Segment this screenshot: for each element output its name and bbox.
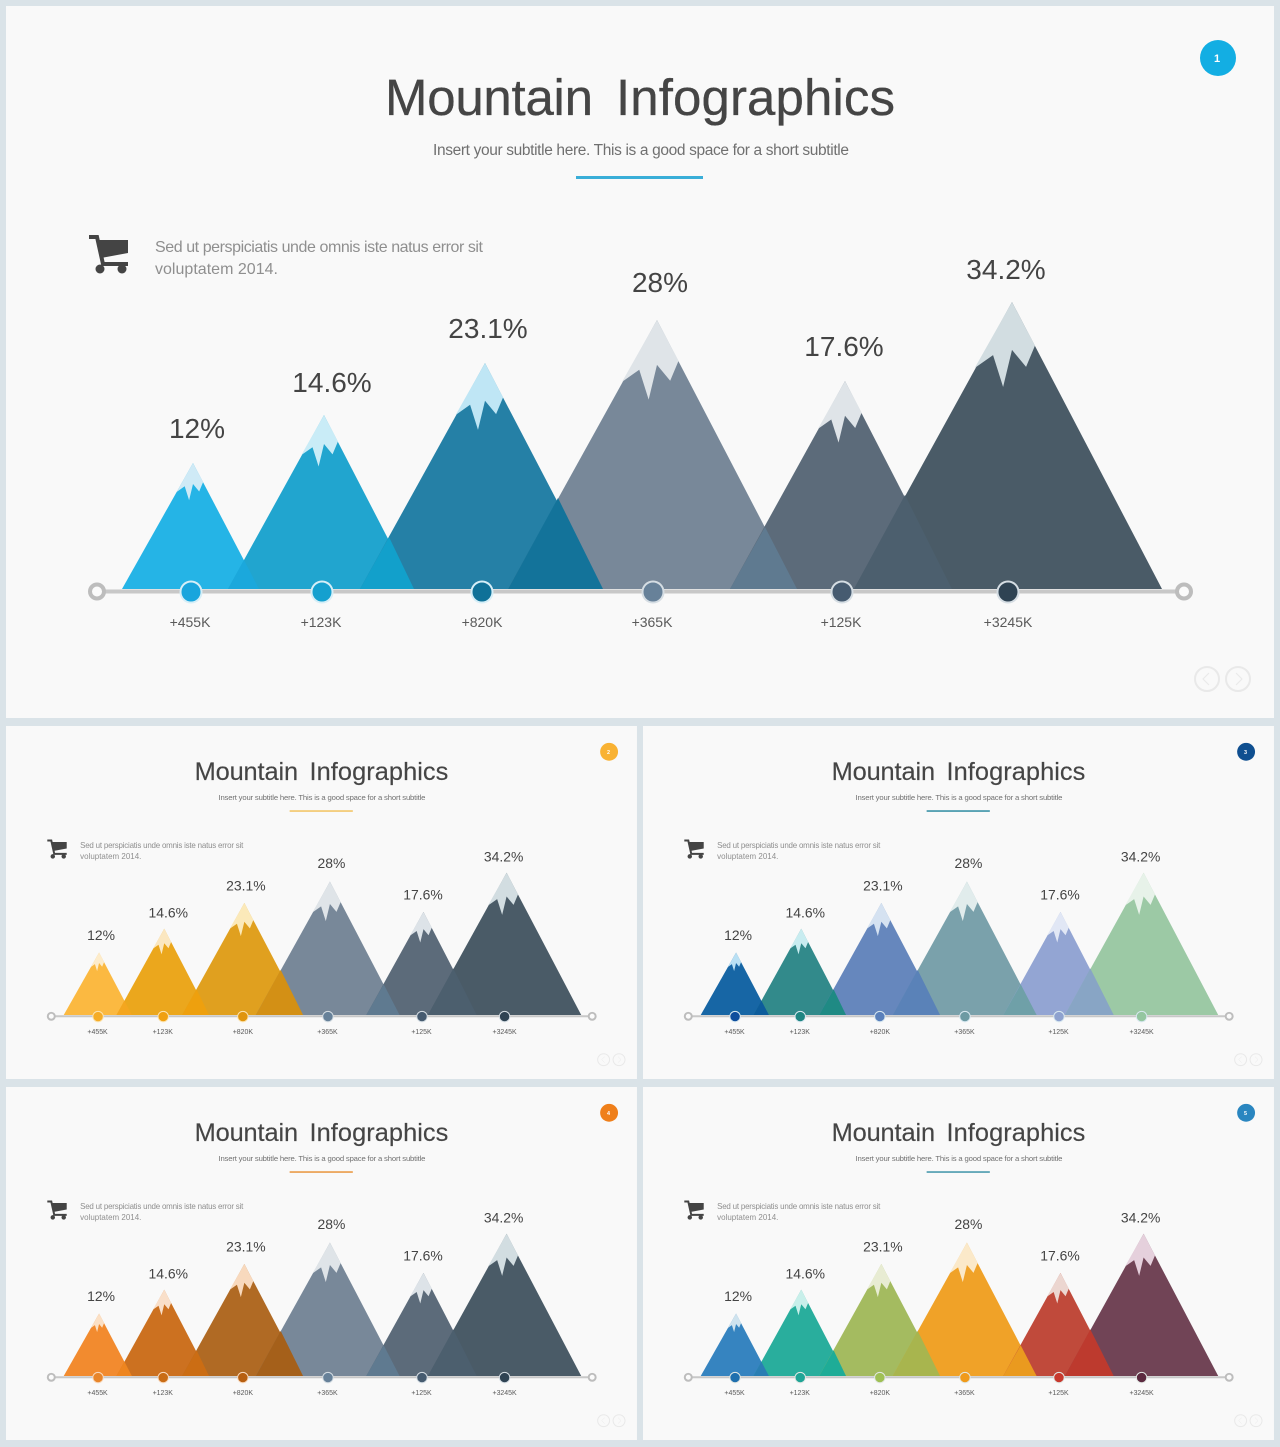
percentage labels: 34.2% xyxy=(1121,848,1160,864)
panel: blue-green slide xyxy=(643,726,1274,1079)
value labels: +455K xyxy=(87,1029,108,1036)
axis markers xyxy=(93,1011,510,1022)
percentage labels: 23.1% xyxy=(448,313,528,344)
title: Infographics xyxy=(310,758,448,786)
subtitle: Insert your subtitle here. This is a good space for a short subtitle xyxy=(218,1154,425,1163)
title xyxy=(195,1119,448,1147)
title underline xyxy=(290,810,353,812)
axis markers xyxy=(730,1372,1147,1383)
badge: slide number xyxy=(1237,743,1255,761)
description text: Sed ut perspiciatis unde omnis iste natus error sit xyxy=(80,841,244,850)
panel: multicolour slide xyxy=(643,1087,1274,1440)
mountain chart xyxy=(48,848,596,1036)
description text: voluptatem 2014. xyxy=(80,1213,141,1222)
nav arrows xyxy=(1235,1054,1262,1066)
subtitle: Insert your subtitle here. This is a good space for a short subtitle xyxy=(218,793,425,802)
percentage labels xyxy=(169,254,1046,444)
subtitle: Insert your subtitle here. This is a good space for a short subtitle xyxy=(855,1154,1062,1163)
mountain 6: 34.2% xyxy=(854,302,1162,589)
description text xyxy=(80,1202,244,1222)
mountain 6: 34.2% xyxy=(428,873,581,1015)
value labels: +365K xyxy=(954,1029,975,1036)
mountain 6: 34.2% xyxy=(1065,1234,1218,1376)
axis end ring: left xyxy=(685,1013,692,1020)
value labels: +123K xyxy=(790,1029,810,1036)
axis markers xyxy=(730,1011,1147,1022)
percentage labels: 12% xyxy=(169,413,225,444)
axis end ring: left xyxy=(48,1374,55,1381)
axis markers xyxy=(93,1372,510,1383)
percentage labels: 34.2% xyxy=(1121,1209,1160,1225)
description text xyxy=(80,841,244,861)
badge: slide number: 5 xyxy=(1244,1111,1247,1117)
title: Mountain xyxy=(385,69,593,126)
percentage labels xyxy=(87,1209,523,1304)
value labels: +3245K xyxy=(1130,1029,1154,1036)
value labels: +365K xyxy=(632,614,673,630)
title xyxy=(195,758,448,786)
description text: Sed ut perspiciatis unde omnis iste natus error sit xyxy=(717,1202,881,1211)
percentage labels: 14.6% xyxy=(785,904,825,920)
percentage labels: 28% xyxy=(317,1216,345,1232)
value labels: +3245K xyxy=(493,1390,517,1397)
badge: slide number: 3 xyxy=(1244,750,1247,756)
percentage labels: 17.6% xyxy=(1040,1248,1080,1264)
title: Mountain xyxy=(195,1119,298,1147)
title: Mountain xyxy=(832,1119,935,1147)
icon: shopping cart xyxy=(684,841,704,859)
badge: slide number xyxy=(1237,1104,1255,1122)
mountain 4: 28% xyxy=(893,1243,1037,1376)
mountain chart xyxy=(90,254,1191,630)
value labels xyxy=(724,1390,1154,1397)
icon: shopping cart xyxy=(684,1202,704,1220)
description text: voluptatem 2014. xyxy=(717,852,778,861)
percentage labels: 23.1% xyxy=(863,1239,903,1255)
description text: Sed ut perspiciatis unde omnis iste natus error sit xyxy=(717,841,881,850)
description text: Sed ut perspiciatis unde omnis iste natus error sit xyxy=(80,1202,244,1211)
mountain chart xyxy=(685,848,1233,1036)
percentage labels: 14.6% xyxy=(292,367,372,398)
percentage labels: 23.1% xyxy=(863,878,903,894)
value labels: +125K xyxy=(821,614,862,630)
title underline xyxy=(576,176,703,179)
percentage labels: 23.1% xyxy=(226,1239,266,1255)
subtitle: Insert your subtitle here. This is a good space for a short subtitle xyxy=(855,793,1062,802)
mountain 1: 12% xyxy=(701,953,769,1015)
title: Infographics xyxy=(947,758,1085,786)
title: Infographics xyxy=(310,1119,448,1147)
axis end ring: right xyxy=(589,1013,596,1020)
title xyxy=(832,758,1085,786)
title underline xyxy=(927,1171,990,1173)
panel: orange slide xyxy=(6,1087,637,1440)
percentage labels: 14.6% xyxy=(148,1265,188,1281)
value labels xyxy=(87,1029,517,1036)
axis end ring: right xyxy=(1226,1013,1233,1020)
value labels: +123K xyxy=(301,614,342,630)
mountain 3: 23.1% xyxy=(360,363,603,589)
value labels: +820K xyxy=(870,1390,890,1397)
percentage labels: 28% xyxy=(632,267,688,298)
title: Mountain xyxy=(832,758,935,786)
badge: slide number xyxy=(1200,40,1236,76)
value labels: +125K xyxy=(411,1029,432,1036)
percentage labels: 28% xyxy=(954,1216,982,1232)
title: Infographics xyxy=(616,69,895,126)
value labels: +123K xyxy=(790,1390,810,1397)
mountain 4: 28% xyxy=(256,882,400,1015)
nav arrows xyxy=(1195,667,1250,691)
axis end ring: right xyxy=(1177,584,1191,598)
mountain 4: 28% xyxy=(508,320,797,589)
description text xyxy=(155,239,484,278)
badge: slide number: 2 xyxy=(607,750,610,756)
percentage labels: 17.6% xyxy=(403,887,443,903)
value labels: +3245K xyxy=(1130,1390,1154,1397)
badge: slide number: 1 xyxy=(1214,53,1220,65)
description text: voluptatem 2014. xyxy=(155,261,278,278)
value labels: +123K xyxy=(153,1029,173,1036)
mountain 3: 23.1% xyxy=(182,903,303,1015)
mountain 1: 12% xyxy=(64,953,132,1015)
badge: slide number xyxy=(600,1104,618,1122)
description text: voluptatem 2014. xyxy=(717,1213,778,1222)
mountain 1: 12% xyxy=(64,1314,132,1376)
mountain 1: 12% xyxy=(122,463,259,589)
icon: shopping cart xyxy=(89,237,128,274)
mountain 5: 17.6% xyxy=(366,1273,477,1376)
nav arrows xyxy=(598,1415,625,1427)
mountain 1: 12% xyxy=(701,1314,769,1376)
mountain 6: 34.2% xyxy=(1065,873,1218,1015)
mountain 5: 17.6% xyxy=(1003,912,1114,1015)
value labels: +123K xyxy=(153,1390,173,1397)
percentage labels: 34.2% xyxy=(484,1209,523,1225)
mountain 5: 17.6% xyxy=(1003,1273,1114,1376)
axis end ring: right xyxy=(589,1374,596,1381)
mountain 2: 14.6% xyxy=(228,415,414,589)
title underline xyxy=(290,1171,353,1173)
subtitle: Insert your subtitle here. This is a good space for a short subtitle xyxy=(433,142,849,159)
percentage labels: 14.6% xyxy=(148,904,188,920)
value labels: +455K xyxy=(724,1390,745,1397)
percentage labels: 34.2% xyxy=(966,254,1046,285)
value labels: +820K xyxy=(233,1029,253,1036)
nav arrows xyxy=(1235,1415,1262,1427)
percentage labels: 28% xyxy=(317,855,345,871)
axis end ring: left xyxy=(48,1013,55,1020)
value labels: +820K xyxy=(233,1390,253,1397)
mountain 3: 23.1% xyxy=(819,1264,940,1376)
mountain 3: 23.1% xyxy=(182,1264,303,1376)
value labels: +125K xyxy=(411,1390,432,1397)
percentage labels: 17.6% xyxy=(1040,887,1080,903)
axis end ring: right xyxy=(1226,1374,1233,1381)
value labels: +820K xyxy=(870,1029,890,1036)
axis end ring: left xyxy=(90,584,104,598)
mountain 4: 28% xyxy=(256,1243,400,1376)
percentage labels: 17.6% xyxy=(403,1248,443,1264)
title xyxy=(385,69,895,126)
icon: shopping cart xyxy=(47,841,67,859)
percentage labels xyxy=(87,848,523,943)
value labels: +365K xyxy=(954,1390,975,1397)
value labels: +3245K xyxy=(493,1029,517,1036)
value labels: +365K xyxy=(317,1029,338,1036)
percentage labels: 23.1% xyxy=(226,878,266,894)
value labels: +3245K xyxy=(984,614,1033,630)
mountain 2: 14.6% xyxy=(116,929,209,1015)
value labels: +820K xyxy=(462,614,503,630)
panel: main slide (blue) xyxy=(6,6,1274,718)
nav arrows xyxy=(598,1054,625,1066)
value labels xyxy=(724,1029,1154,1036)
axis markers xyxy=(180,582,1018,602)
value labels: +455K xyxy=(87,1390,108,1397)
percentage labels: 12% xyxy=(724,1288,752,1304)
percentage labels: 12% xyxy=(87,1288,115,1304)
mountain chart xyxy=(48,1209,596,1397)
mountain chart xyxy=(685,1209,1233,1397)
description text xyxy=(717,841,881,861)
axis end ring: left xyxy=(685,1374,692,1381)
value labels: +455K xyxy=(170,614,211,630)
mountain 5: 17.6% xyxy=(730,381,952,589)
value labels xyxy=(87,1390,517,1397)
value labels: +125K xyxy=(1048,1029,1069,1036)
mountain 2: 14.6% xyxy=(753,929,846,1015)
title: Mountain xyxy=(195,758,298,786)
mountain 3: 23.1% xyxy=(819,903,940,1015)
panel: yellow slide xyxy=(6,726,637,1079)
percentage labels: 12% xyxy=(724,927,752,943)
percentage labels: 12% xyxy=(87,927,115,943)
icon: shopping cart xyxy=(47,1202,67,1220)
value labels: +365K xyxy=(317,1390,338,1397)
mountain 6: 34.2% xyxy=(428,1234,581,1376)
value labels: +125K xyxy=(1048,1390,1069,1397)
percentage labels xyxy=(724,848,1160,943)
badge: slide number xyxy=(600,743,618,761)
mountain 2: 14.6% xyxy=(116,1290,209,1376)
mountain 5: 17.6% xyxy=(366,912,477,1015)
value labels xyxy=(170,614,1033,630)
percentage labels: 14.6% xyxy=(785,1265,825,1281)
mountain 4: 28% xyxy=(893,882,1037,1015)
description text: Sed ut perspiciatis unde omnis iste natus error sit xyxy=(155,239,484,256)
description text xyxy=(717,1202,881,1222)
percentage labels: 34.2% xyxy=(484,848,523,864)
percentage labels: 17.6% xyxy=(804,331,884,362)
percentage labels: 28% xyxy=(954,855,982,871)
title xyxy=(832,1119,1085,1147)
title: Infographics xyxy=(947,1119,1085,1147)
badge: slide number: 4 xyxy=(607,1111,610,1117)
title underline xyxy=(927,810,990,812)
mountain 2: 14.6% xyxy=(753,1290,846,1376)
percentage labels xyxy=(724,1209,1160,1304)
description text: voluptatem 2014. xyxy=(80,852,141,861)
value labels: +455K xyxy=(724,1029,745,1036)
